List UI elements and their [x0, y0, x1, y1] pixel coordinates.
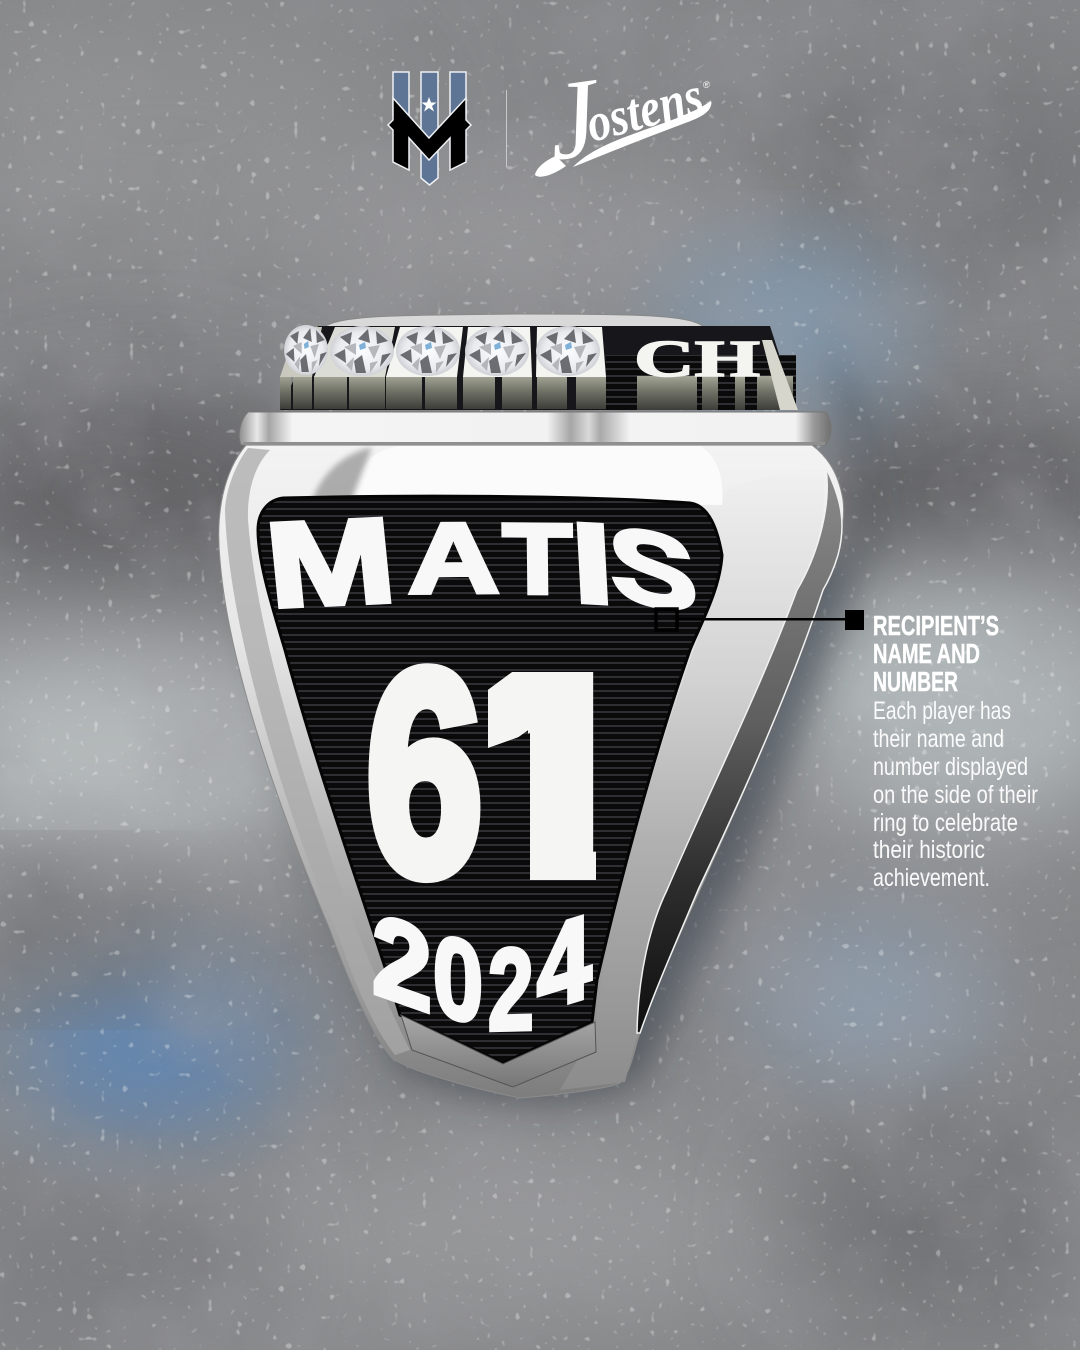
- ring text: MATIS: [260, 493, 702, 636]
- ring text: MATIS: S: [604, 503, 702, 636]
- ring text: year 2024: 4: [537, 890, 592, 1038]
- crown ribbed floor: [606, 355, 796, 410]
- gem block sides: [280, 376, 606, 409]
- crown black base: [280, 326, 797, 410]
- callout heading: RECIPIENT’S: [873, 610, 999, 641]
- ring: shoulder highlight: [350, 446, 723, 505]
- ring: black ribbed name panel: [258, 496, 722, 1087]
- ring text: number 61: 1: [470, 592, 637, 972]
- ring text: MATIS: I: [570, 500, 615, 627]
- callout heading: NAME AND: [873, 638, 980, 669]
- ring text: MATIS: M: [260, 493, 401, 633]
- callout heading: NUMBER: [873, 666, 958, 697]
- ring text: year 2024: 2: [488, 925, 534, 1055]
- logo: Jostens script: ®: [703, 80, 710, 90]
- ring: main silver body: [219, 445, 844, 1098]
- crown letters CH: [634, 331, 798, 410]
- callout body: [873, 697, 1038, 892]
- gem block tops: [280, 327, 606, 377]
- callout body: their name and: [873, 725, 1004, 753]
- ring: right silver shank: [560, 470, 824, 1090]
- callout body: Each player has: [873, 697, 1011, 725]
- ring: crown top with gems and letters: [280, 314, 798, 410]
- logo: Jostens script: J: [539, 54, 611, 185]
- panel chevron plate: [401, 1015, 596, 1087]
- ring text: number 61: 6: [366, 611, 483, 935]
- callout body: on the side of their: [873, 781, 1038, 809]
- ring text: year 2024: [372, 888, 592, 1055]
- logo: Jostens script: ostens: [580, 65, 709, 154]
- logo divider: [506, 90, 507, 167]
- ring text: year 2024: 0: [433, 910, 483, 1051]
- callout body: ring to celebrate: [873, 809, 1018, 837]
- callout body: number displayed: [873, 753, 1028, 781]
- ring: left body shading: [225, 448, 410, 1055]
- callout text: recipient's name and number: [873, 610, 1038, 892]
- ring: dark side stripe: [637, 468, 842, 1033]
- ring: polished band below crown: [239, 412, 831, 445]
- crown top rim: [322, 314, 704, 328]
- ring text: MATIS: A: [407, 503, 500, 615]
- callout heading: [873, 610, 999, 697]
- diamonds: [284, 325, 600, 376]
- logo: Jostens script: [535, 54, 711, 185]
- ring: shoulder shade: [312, 447, 372, 500]
- logo: team M shield: [388, 72, 471, 185]
- callout: marker box and leader line: [656, 609, 864, 630]
- ring text: MATIS: T: [502, 503, 573, 615]
- ring drop shadow: [249, 330, 880, 1101]
- ring text: year 2024: 2: [372, 888, 432, 1038]
- crown letters CH: CH: [634, 331, 760, 388]
- callout body: achievement.: [873, 864, 990, 892]
- callout body: their historic: [873, 836, 985, 864]
- ring text: number 61: [368, 663, 596, 884]
